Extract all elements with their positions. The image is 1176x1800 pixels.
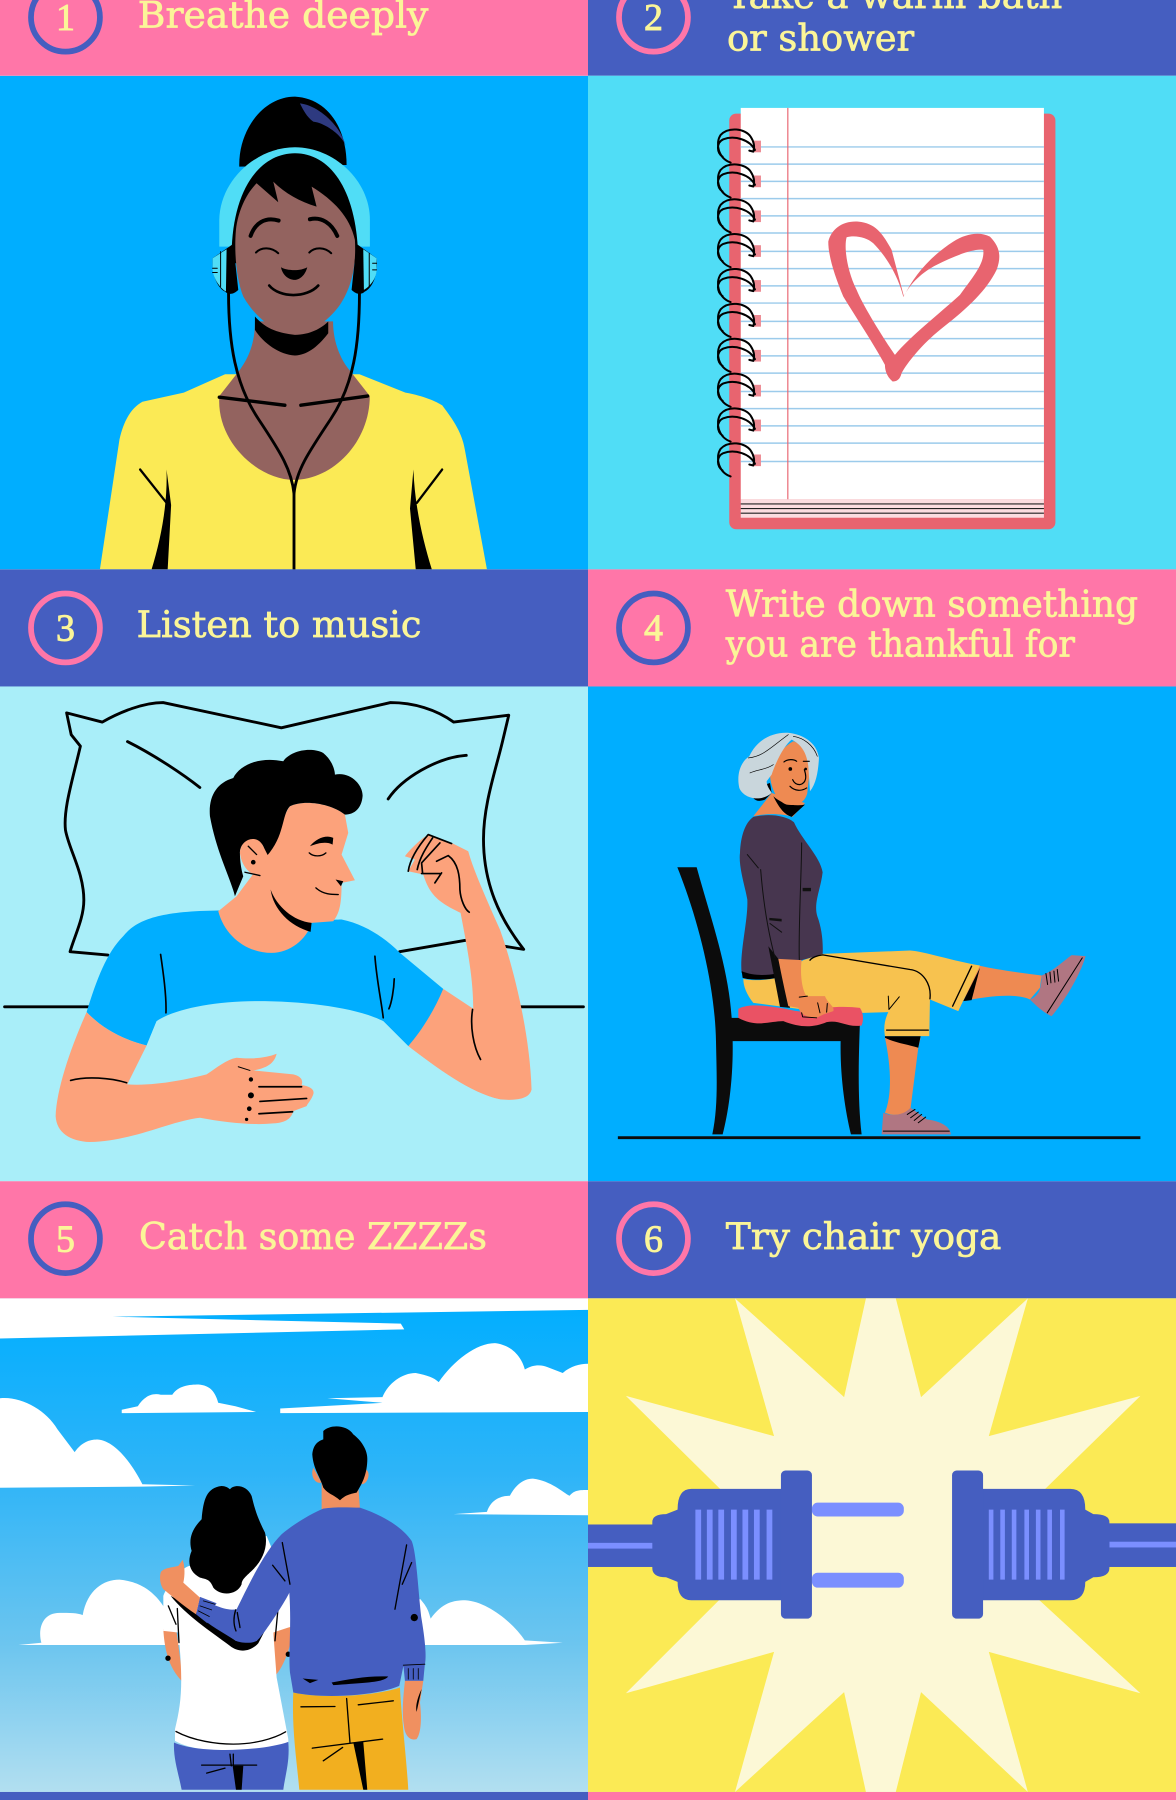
panel: woman with headphones <box>0 76 588 569</box>
ruled lines <box>741 147 1044 461</box>
spiral binding <box>718 129 761 476</box>
header: tip 5 ZZZZs: Catch some ZZZZs <box>139 1215 487 1258</box>
blanket <box>107 1001 533 1173</box>
pillow creases <box>127 742 466 799</box>
neck <box>753 793 805 817</box>
man: sleeve cuff <box>196 1597 217 1623</box>
collarbones, cords and creases <box>140 293 442 569</box>
face <box>770 741 810 805</box>
header: tip 6 chair yoga: 6 <box>644 1218 663 1260</box>
raised shoe <box>1030 955 1086 1016</box>
header: tip 4 thankful <box>588 569 1176 686</box>
lower leg down <box>885 1038 921 1115</box>
neck and chest <box>219 321 370 480</box>
heart <box>828 221 999 381</box>
starburst <box>626 1298 1140 1792</box>
hand and arm details <box>71 1067 307 1121</box>
header: tip 6 chair yoga: Try chair yoga <box>726 1215 1001 1258</box>
notebook page <box>741 108 1044 499</box>
panel: unplugged plug <box>588 1298 1176 1792</box>
header: tip 1 breathe deeply <box>0 0 588 76</box>
left arm and hand <box>56 1012 314 1142</box>
header: tip 3 listen to music: Listen to music <box>137 603 421 646</box>
notebook cover <box>729 114 1055 529</box>
woman: arms <box>163 1626 293 1683</box>
header: tip 4 thankful: Write down something <box>726 582 1138 625</box>
ground line <box>618 1136 1140 1139</box>
face details <box>748 735 817 790</box>
hair <box>738 733 819 798</box>
header: tip 3 listen to music: 3 <box>56 608 75 650</box>
man: hand on shoulder <box>160 1560 200 1614</box>
man: arm shadow <box>171 1596 270 1651</box>
man: trousers <box>293 1688 408 1790</box>
header: tip 6 chair yoga <box>588 1181 1176 1298</box>
clouds <box>0 1298 588 1645</box>
man: sweater details <box>234 1543 418 1685</box>
shoe down <box>882 1108 951 1134</box>
panel: chair yoga <box>588 686 1176 1181</box>
chair <box>677 867 862 1134</box>
shirt <box>87 911 443 1046</box>
raised arm and hand <box>405 835 532 1100</box>
header: tip 2 warm bath <box>588 0 1176 76</box>
panel: man sleeping <box>0 686 588 1181</box>
yellow top <box>100 374 487 569</box>
woman: shirt <box>163 1536 295 1751</box>
couple seen from behind <box>160 1426 426 1790</box>
woman: hair <box>189 1486 266 1593</box>
header: tip 5 ZZZZs <box>0 1181 588 1298</box>
cushion <box>738 1005 863 1026</box>
bottom strips of next row <box>0 1792 1176 1800</box>
raised lower leg <box>963 966 1042 1001</box>
sweater details <box>747 843 811 960</box>
shirt creases <box>161 955 394 1018</box>
pillow outline <box>65 703 524 955</box>
header: tip 4 thankful: 4 <box>644 608 663 650</box>
neck and face <box>218 803 355 953</box>
header: tip 4 thankful: you are thankful for <box>725 623 1075 666</box>
right plug <box>952 1471 1176 1619</box>
arm and hand <box>768 946 834 1018</box>
left plug <box>588 1471 904 1619</box>
bed line <box>5 1006 583 1008</box>
man: neck and ears <box>312 1468 369 1509</box>
woman: jeans <box>174 1742 289 1790</box>
page stack <box>741 499 1044 518</box>
sweater <box>740 815 823 978</box>
panel: notebook with heart <box>588 76 1176 569</box>
ear <box>240 839 268 876</box>
face details <box>271 837 343 932</box>
header: tip 5 ZZZZs: 5 <box>56 1218 75 1260</box>
header: tip 3 listen to music <box>0 569 588 686</box>
panel: couple looking at the sky <box>0 1298 588 1792</box>
header: tip 2 warm bath: or shower <box>727 17 915 60</box>
woman: shirt details <box>165 1606 291 1744</box>
man figure <box>56 750 533 1173</box>
man: sweater <box>197 1507 426 1696</box>
hair <box>210 750 363 896</box>
seated woman on chair <box>677 733 1086 1134</box>
head with bun, headphones and face <box>213 97 377 356</box>
pants <box>743 951 980 1036</box>
man: right cuff and hand <box>403 1663 425 1739</box>
man: hair <box>312 1426 367 1500</box>
